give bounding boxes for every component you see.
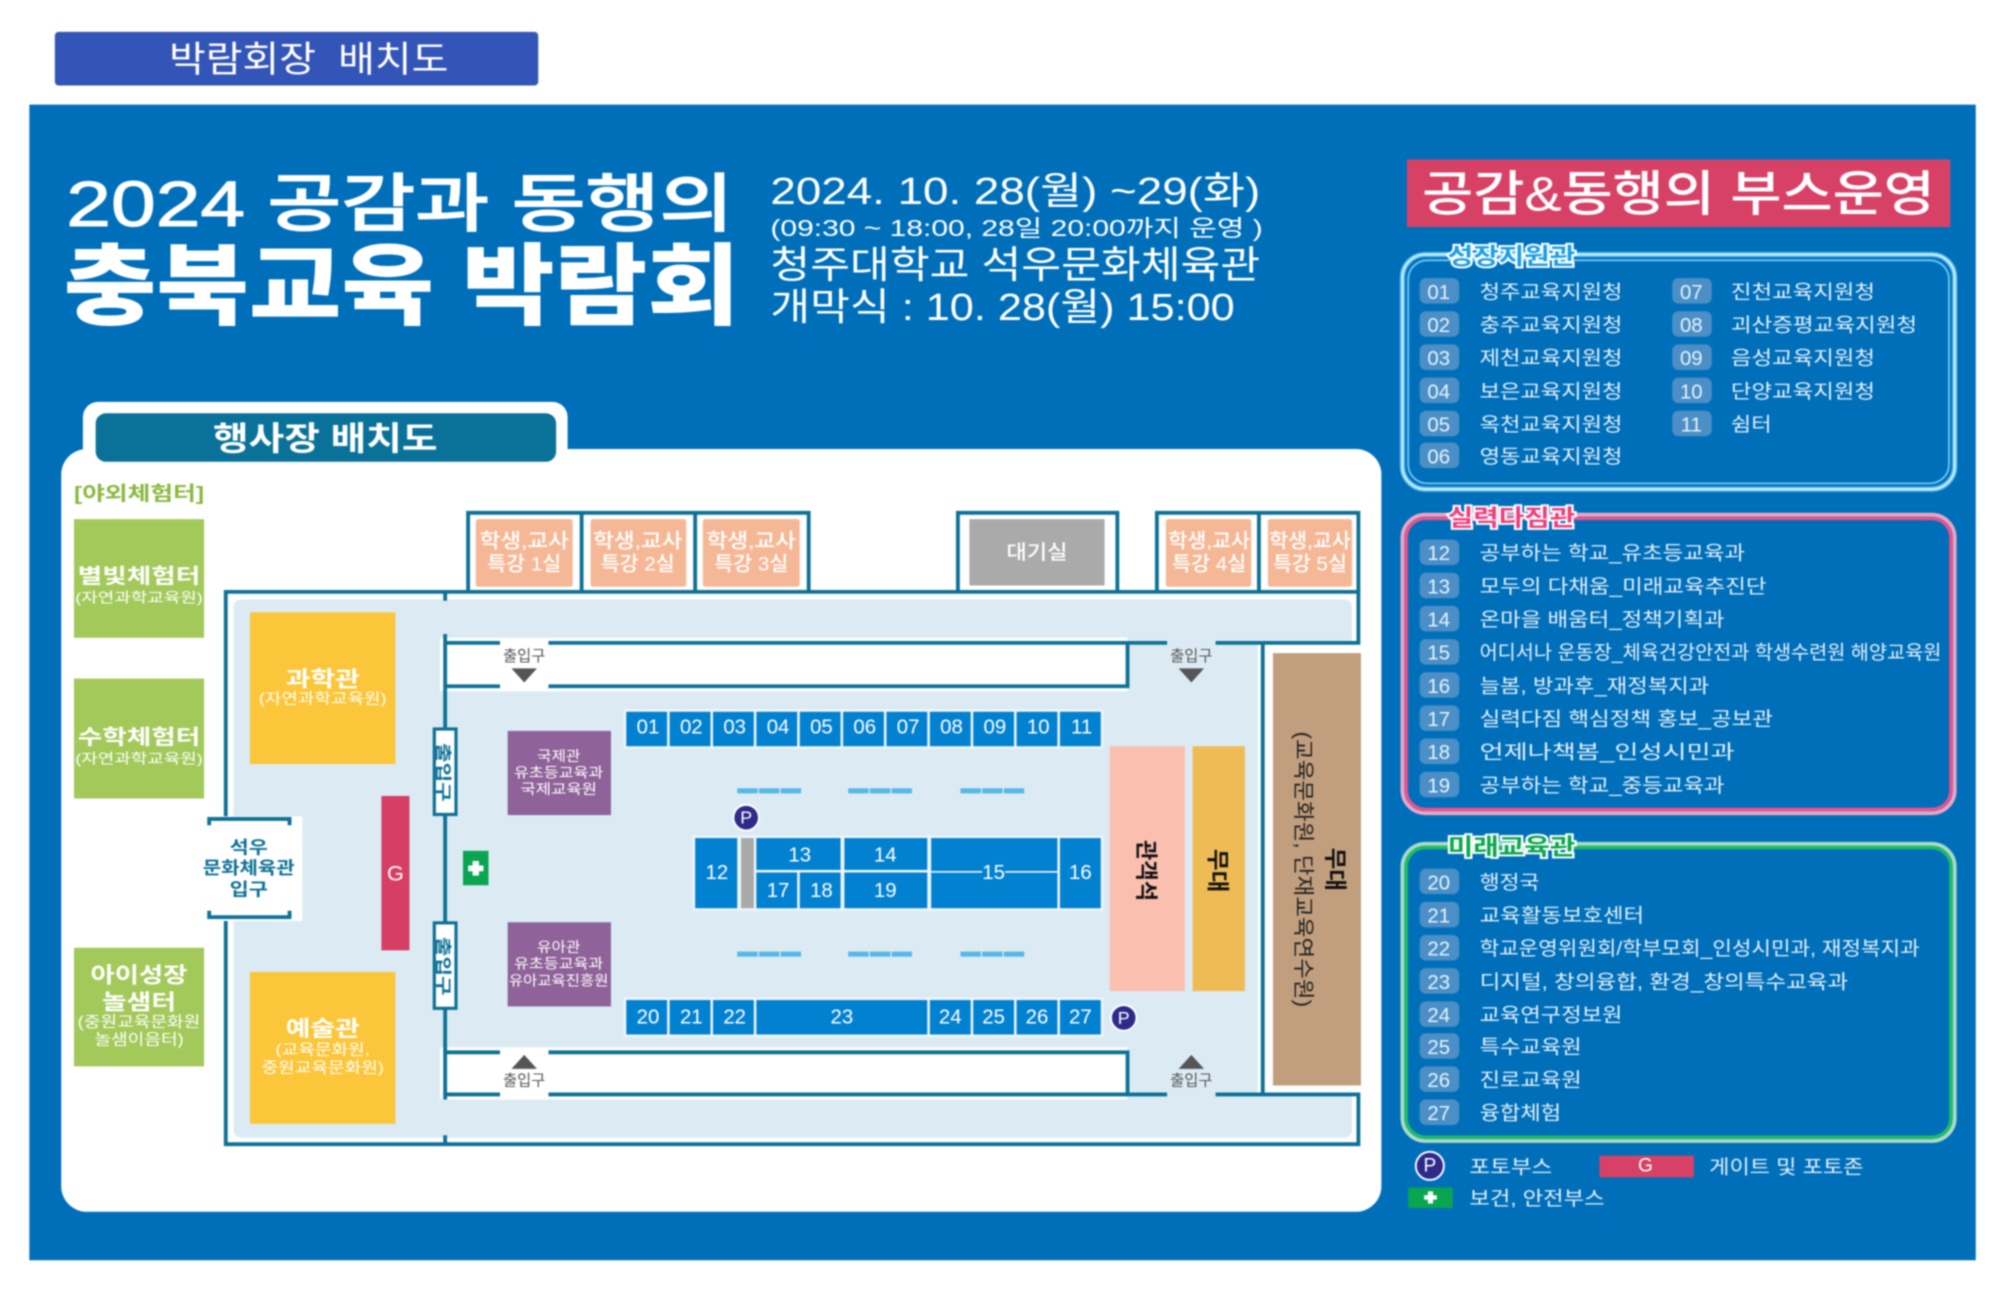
booth row 20-27: 25 bbox=[982, 1006, 1005, 1028]
main stage brown: 무대 bbox=[1322, 848, 1348, 891]
science hall: (자연과학교육원) bbox=[259, 691, 386, 708]
panel: growth support hall: 11 bbox=[1681, 414, 1702, 436]
arts hall: 예술관 bbox=[286, 1016, 360, 1041]
booth block 12-19: 16 bbox=[1069, 862, 1092, 884]
panel: future education hall: 교육연구정보원 bbox=[1480, 1004, 1622, 1026]
booth row 20-27: 26 bbox=[1026, 1006, 1048, 1028]
booth row 20-27: 23 bbox=[830, 1006, 853, 1028]
booth row 01-11: 06 bbox=[853, 717, 876, 739]
purple halls: 유아교육진흥원 bbox=[509, 972, 608, 988]
booth row 20-27: 24 bbox=[939, 1006, 962, 1028]
hall floor bbox=[233, 600, 1360, 1138]
panel: growth support hall: 충주교육지원청 bbox=[1480, 314, 1622, 336]
purple halls bbox=[508, 731, 611, 1006]
booth row 01-11: 10 bbox=[1027, 717, 1050, 739]
panel: future education hall bbox=[1402, 833, 1955, 1141]
gate G bbox=[381, 796, 409, 950]
top banner bbox=[55, 32, 538, 85]
booth row 20-27: 21 bbox=[680, 1006, 703, 1028]
panel: skill building hall: 14 bbox=[1427, 610, 1450, 632]
audience seats bbox=[1110, 746, 1185, 991]
icon: photo booth markers bbox=[733, 805, 1136, 1031]
exits with arrows: 출입구 bbox=[503, 1073, 545, 1090]
side entrances: 출입구 bbox=[434, 743, 453, 802]
heading: floor plan: 행사장 배치도 bbox=[213, 421, 437, 458]
arts hall bbox=[250, 972, 395, 1124]
booth row 01-11: 09 bbox=[984, 717, 1006, 739]
outdoor zones: 별빛체험터 bbox=[78, 565, 200, 588]
panel: future education hall: 23 bbox=[1427, 972, 1450, 994]
lecture rooms and waiting room: 특강 4실 bbox=[1172, 553, 1246, 575]
panel: future education hall: 20 bbox=[1427, 872, 1450, 894]
panel: future education hall: 27 bbox=[1427, 1103, 1450, 1125]
booth row 20-27: 20 bbox=[637, 1006, 659, 1028]
exits with arrows: 출입구 bbox=[1170, 1073, 1212, 1090]
exits with arrows bbox=[503, 648, 1212, 1090]
purple halls: 국제교육원 bbox=[520, 781, 597, 797]
event details: (09:30 ~ 18:00, 28일 20:00까지 운영 ) bbox=[770, 215, 1263, 241]
booth row 01-11: 07 bbox=[897, 717, 920, 739]
booth block 12-19: 15 bbox=[982, 862, 1005, 884]
outdoor zones: 수학체험터 bbox=[78, 726, 200, 749]
booth row 01-11: 05 bbox=[810, 717, 833, 739]
booth header bbox=[1407, 159, 1950, 227]
panel: growth support hall bbox=[1402, 243, 1955, 489]
lecture rooms and waiting room: 학생,교사 bbox=[707, 530, 796, 552]
panel: growth support hall: 05 bbox=[1427, 414, 1450, 436]
outdoor zones: (자연과학교육원) bbox=[75, 590, 203, 606]
booth row 01-11: 04 bbox=[767, 717, 789, 739]
legend: G bbox=[1638, 1155, 1653, 1176]
panel: skill building hall: 17 bbox=[1427, 709, 1450, 731]
audience seats: 관객석 bbox=[1134, 840, 1160, 901]
science hall: 과학관 bbox=[286, 667, 360, 692]
legend: P bbox=[1423, 1155, 1436, 1176]
lecture rooms and waiting room: 특강 3실 bbox=[714, 553, 788, 575]
panel: growth support hall: 보은교육지원청 bbox=[1480, 381, 1622, 403]
panel: future education hall: 융합체험 bbox=[1480, 1103, 1561, 1125]
exits with arrows: 출입구 bbox=[1170, 648, 1212, 665]
panel: future education hall: 디지털, 창의융합, 환경_창의특수교육과 bbox=[1480, 971, 1848, 993]
booth row 20-27: 22 bbox=[723, 1006, 746, 1028]
panel: skill building hall: 모두의 다채움_미래교육추진단 bbox=[1480, 576, 1767, 598]
lecture rooms and waiting room: 학생,교사 bbox=[593, 530, 682, 552]
stage bbox=[1193, 746, 1245, 991]
panel: skill building hall: 실력다짐 핵심정책 홍보_공보관 bbox=[1480, 709, 1773, 731]
side entrances: 출입구 bbox=[434, 937, 453, 996]
legend: 보건, 안전부스 bbox=[1469, 1188, 1605, 1210]
gate G: G bbox=[387, 861, 404, 886]
lecture rooms and waiting room: 특강 2실 bbox=[601, 553, 675, 575]
icon: first aid booth bbox=[463, 851, 489, 885]
dashed markers bbox=[737, 788, 1024, 957]
outdoor zones: 놀샘이음터) bbox=[94, 1032, 184, 1049]
booth block 12-19: 17 bbox=[767, 880, 789, 902]
lecture rooms and waiting room: 학생,교사 bbox=[480, 530, 569, 552]
booth block 12-19: 13 bbox=[788, 844, 811, 866]
panel: skill building hall: 늘봄, 방과후_재정복지과 bbox=[1480, 675, 1709, 697]
outdoor zones: (자연과학교육원) bbox=[75, 750, 203, 766]
panel: skill building hall: 어디서나 운동장_체육건강안전과 학생수련원 해양교육원 bbox=[1480, 642, 1941, 664]
hall entrance bbox=[203, 816, 302, 921]
legend: 게이트 및 포토존 bbox=[1709, 1156, 1864, 1178]
panel: growth support hall: 제천교육지원청 bbox=[1480, 348, 1622, 370]
booth block 12-19: 14 bbox=[874, 844, 897, 866]
panel: future education hall: 학교운영위원회/학부모회_인성시민과, 재정복지과 bbox=[1480, 938, 1920, 960]
panel: skill building hall: 12 bbox=[1427, 543, 1450, 565]
booth row 01-11: 02 bbox=[680, 717, 703, 739]
panel: future education hall: 진로교육원 bbox=[1480, 1070, 1582, 1092]
hall entrance: 입구 bbox=[230, 880, 268, 900]
panel: skill building hall: 공부하는 학교_유초등교육과 bbox=[1480, 543, 1745, 565]
booth block 12-19: 18 bbox=[810, 880, 833, 902]
panel: floor plan card bbox=[61, 402, 1381, 1212]
booth row 01-11: 01 bbox=[637, 717, 659, 739]
panel: growth support hall: 10 bbox=[1680, 381, 1703, 403]
panel: growth support hall: 괴산증평교육지원청 bbox=[1731, 314, 1917, 336]
panel: growth support hall: 영동교육지원청 bbox=[1480, 446, 1622, 468]
outdoor zones: [야외체험터] bbox=[74, 483, 204, 505]
panel: growth support hall: 옥천교육지원청 bbox=[1480, 414, 1622, 436]
booth row 20-27: 27 bbox=[1069, 1006, 1092, 1028]
booth row 01-11: 11 bbox=[1071, 717, 1092, 739]
hall entrance: 문화체육관 bbox=[203, 858, 295, 878]
panel: future education hall: 교육활동보호센터 bbox=[1480, 905, 1644, 927]
legend bbox=[1408, 1152, 1864, 1210]
panel: growth support hall: 09 bbox=[1680, 348, 1703, 370]
panel: growth support hall: 04 bbox=[1427, 381, 1450, 403]
lecture rooms and waiting room bbox=[468, 513, 1358, 592]
panel: skill building hall bbox=[1402, 504, 1955, 813]
top banner: 박람회장 배치도 bbox=[169, 39, 448, 79]
panel: growth support hall: 쉼터 bbox=[1731, 414, 1772, 436]
panel: growth support hall: 02 bbox=[1427, 315, 1450, 337]
panel: future education hall: 미래교육관 bbox=[1448, 833, 1575, 859]
heading: floor plan bbox=[96, 413, 556, 462]
title bbox=[64, 168, 740, 337]
panel: skill building hall: 실력다짐관 bbox=[1448, 504, 1575, 530]
icon: photo booth markers: P bbox=[1118, 1008, 1130, 1028]
exits with arrows: 출입구 bbox=[503, 648, 545, 665]
legend: 포토부스 bbox=[1469, 1157, 1552, 1178]
lecture rooms and waiting room: 특강 1실 bbox=[487, 553, 561, 575]
booth block 12-19: 19 bbox=[874, 880, 897, 902]
panel: future education hall: 21 bbox=[1427, 905, 1450, 927]
panel: growth support hall: 01 bbox=[1427, 282, 1450, 304]
outdoor zones bbox=[74, 483, 204, 1066]
lecture rooms and waiting room: 학생,교사 bbox=[1168, 530, 1250, 552]
panel: future education hall: 25 bbox=[1427, 1037, 1450, 1059]
main stage brown: (교육문화원, 단재교육연수원) bbox=[1291, 732, 1316, 1007]
panel: skill building hall: 18 bbox=[1427, 742, 1450, 764]
panel: growth support hall: 음성교육지원청 bbox=[1731, 348, 1875, 370]
panel: future education hall: 24 bbox=[1427, 1005, 1450, 1027]
booth block 12-19 bbox=[693, 836, 1103, 911]
panel: skill building hall: 온마을 배움터_정책기획과 bbox=[1480, 609, 1724, 631]
arts hall: 중원교육문화원) bbox=[261, 1059, 384, 1076]
panel: skill building hall: 공부하는 학교_중등교육과 bbox=[1480, 775, 1724, 797]
panel: growth support hall: 06 bbox=[1427, 446, 1450, 468]
panel: growth support hall: 성장지원관 bbox=[1448, 243, 1575, 269]
lecture rooms and waiting room: 대기실 bbox=[1006, 542, 1068, 564]
purple halls: 유아관 bbox=[537, 939, 580, 955]
outdoor zones: 아이성장 bbox=[91, 963, 188, 988]
lecture rooms and waiting room: 특강 5실 bbox=[1273, 553, 1347, 575]
panel: future education hall: 특수교육원 bbox=[1480, 1036, 1582, 1058]
stage: 무대 bbox=[1205, 849, 1231, 892]
purple halls: 유초등교육과 bbox=[514, 956, 603, 972]
event details: 2024. 10. 28(월) ~29(화) bbox=[770, 170, 1260, 213]
main stage brown bbox=[1273, 653, 1361, 1086]
arts hall: (교육문화원, bbox=[276, 1041, 370, 1058]
outdoor zones: (중원교육문화원 bbox=[78, 1014, 200, 1031]
panel: skill building hall: 언제나책봄_인성시민과 bbox=[1480, 742, 1735, 764]
side entrances bbox=[434, 729, 456, 1008]
panel: future education hall: 행정국 bbox=[1480, 872, 1540, 894]
panel: growth support hall: 진천교육지원청 bbox=[1731, 281, 1875, 303]
purple halls: 국제관 bbox=[537, 748, 580, 764]
panel: growth support hall: 청주교육지원청 bbox=[1480, 281, 1622, 303]
science hall bbox=[250, 612, 395, 764]
panel: future education hall: 26 bbox=[1427, 1070, 1450, 1092]
title: 2024 공감과 동행의 bbox=[66, 168, 733, 240]
booth header: 공감&동행의 부스운영 bbox=[1422, 168, 1935, 222]
booth row 01-11 bbox=[624, 709, 1103, 749]
purple halls: 유초등교육과 bbox=[514, 764, 603, 780]
hall entrance: 석우 bbox=[230, 838, 268, 858]
event details: 개막식 : 10. 28(월) 15:00 bbox=[770, 286, 1235, 329]
panel: growth support hall: 단양교육지원청 bbox=[1731, 381, 1875, 403]
booth block 12-19: 12 bbox=[705, 862, 728, 884]
panel: skill building hall: 19 bbox=[1427, 775, 1450, 797]
panel: skill building hall: 13 bbox=[1427, 576, 1450, 598]
title: 충북교육 박람회 bbox=[64, 237, 740, 337]
event details bbox=[770, 170, 1263, 329]
booth row 20-27 bbox=[624, 997, 1103, 1037]
hall walls bbox=[226, 592, 1358, 1144]
booth row 01-11: 03 bbox=[723, 717, 746, 739]
panel: growth support hall: 07 bbox=[1680, 282, 1703, 304]
booth row 01-11: 08 bbox=[940, 717, 963, 739]
lecture rooms and waiting room: 학생,교사 bbox=[1269, 530, 1351, 552]
panel: skill building hall: 16 bbox=[1427, 676, 1450, 698]
panel: growth support hall: 03 bbox=[1427, 348, 1450, 370]
event details: 청주대학교 석우문화체육관 bbox=[770, 244, 1260, 287]
panel: skill building hall: 15 bbox=[1427, 643, 1450, 665]
panel: growth support hall: 08 bbox=[1680, 315, 1703, 337]
icon: photo booth markers: P bbox=[740, 808, 752, 828]
panel: future education hall: 22 bbox=[1427, 939, 1450, 961]
outdoor zones: 놀샘터 bbox=[102, 989, 176, 1014]
